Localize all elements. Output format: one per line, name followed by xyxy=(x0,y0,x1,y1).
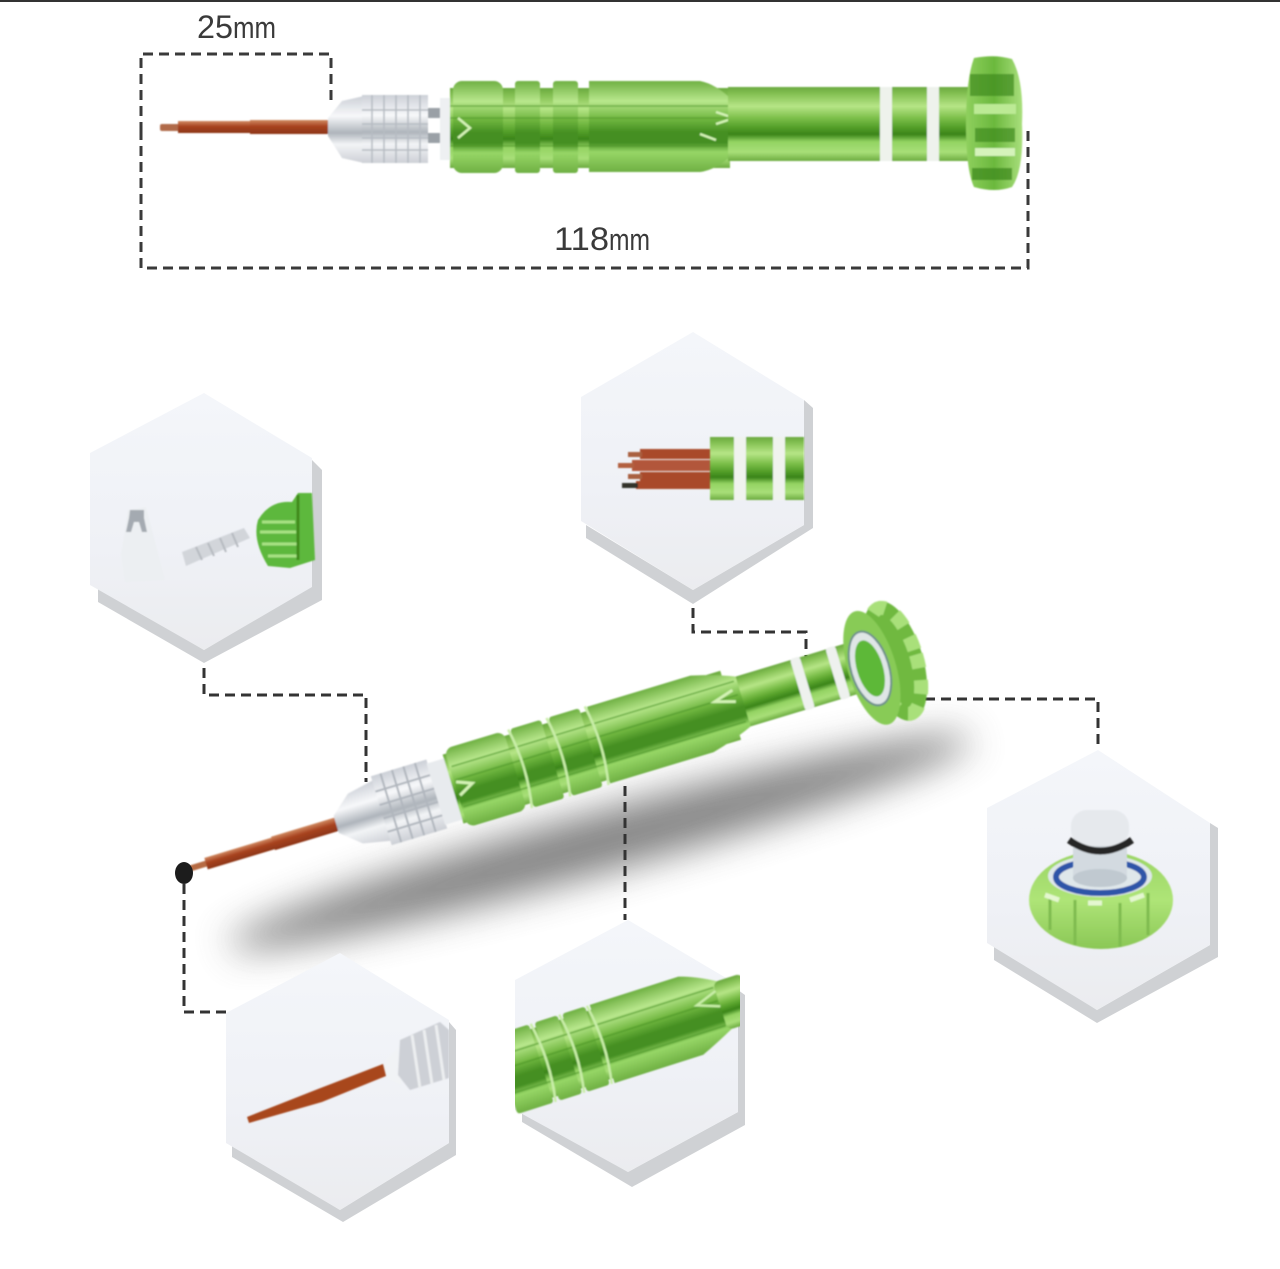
main: silver chuck xyxy=(326,754,465,859)
connector: handle detail to hexagon xyxy=(624,786,626,920)
panel: handle hexagon xyxy=(515,920,745,1187)
green knob body xyxy=(1029,851,1173,949)
side view: green shaft with white bands xyxy=(728,87,968,161)
dimension label: 118mm: 118 xyxy=(554,221,609,257)
main: copper bit xyxy=(183,816,342,877)
dimension label: 25mm: 25 xyxy=(197,9,233,45)
side view: copper bit xyxy=(160,120,328,134)
green handles with white bands xyxy=(710,437,804,500)
main: green shaft with white bands xyxy=(735,640,871,727)
connector: head detail to hexagon xyxy=(925,699,1098,745)
connector: chuck detail to hexagon xyxy=(204,652,366,782)
green knob xyxy=(256,493,315,568)
side view: green handle xyxy=(450,81,734,173)
silver stem with o-ring xyxy=(1069,810,1132,887)
side view: silver chuck xyxy=(328,95,450,163)
screwdriver: side view xyxy=(160,56,1022,190)
threaded stem xyxy=(182,528,250,566)
main: green handle xyxy=(441,661,760,828)
main angled screwdriver xyxy=(169,593,940,934)
main: knurled head xyxy=(831,593,940,734)
copper bit xyxy=(247,1064,386,1123)
dimension bracket: 25mm tip length xyxy=(141,54,331,130)
connector: tip detail to hexagon xyxy=(184,884,230,1012)
top border line xyxy=(0,0,1280,2)
panel: shaft bands hexagon xyxy=(581,332,813,604)
dimension label: 118mm: mm xyxy=(609,222,650,257)
panel: chuck removed hexagon xyxy=(90,393,322,663)
green handle close-up xyxy=(515,974,740,1114)
chuck cap xyxy=(121,507,165,582)
chuck xyxy=(384,1022,449,1090)
dimension bracket: 118mm overall length xyxy=(141,125,1028,268)
black dot on tip xyxy=(175,862,193,884)
connector: bands detail to hexagon xyxy=(693,592,806,658)
side view: knurled head xyxy=(966,56,1022,190)
dimension label: 25mm xyxy=(197,9,276,45)
copper bits xyxy=(618,449,712,489)
dimension label: 118mm xyxy=(554,221,650,257)
ground shadow under screwdriver xyxy=(221,710,979,974)
dimension label: 25mm: mm xyxy=(233,10,276,45)
panel: knob hexagon xyxy=(987,750,1218,1023)
panel: tip hexagon xyxy=(226,953,456,1222)
